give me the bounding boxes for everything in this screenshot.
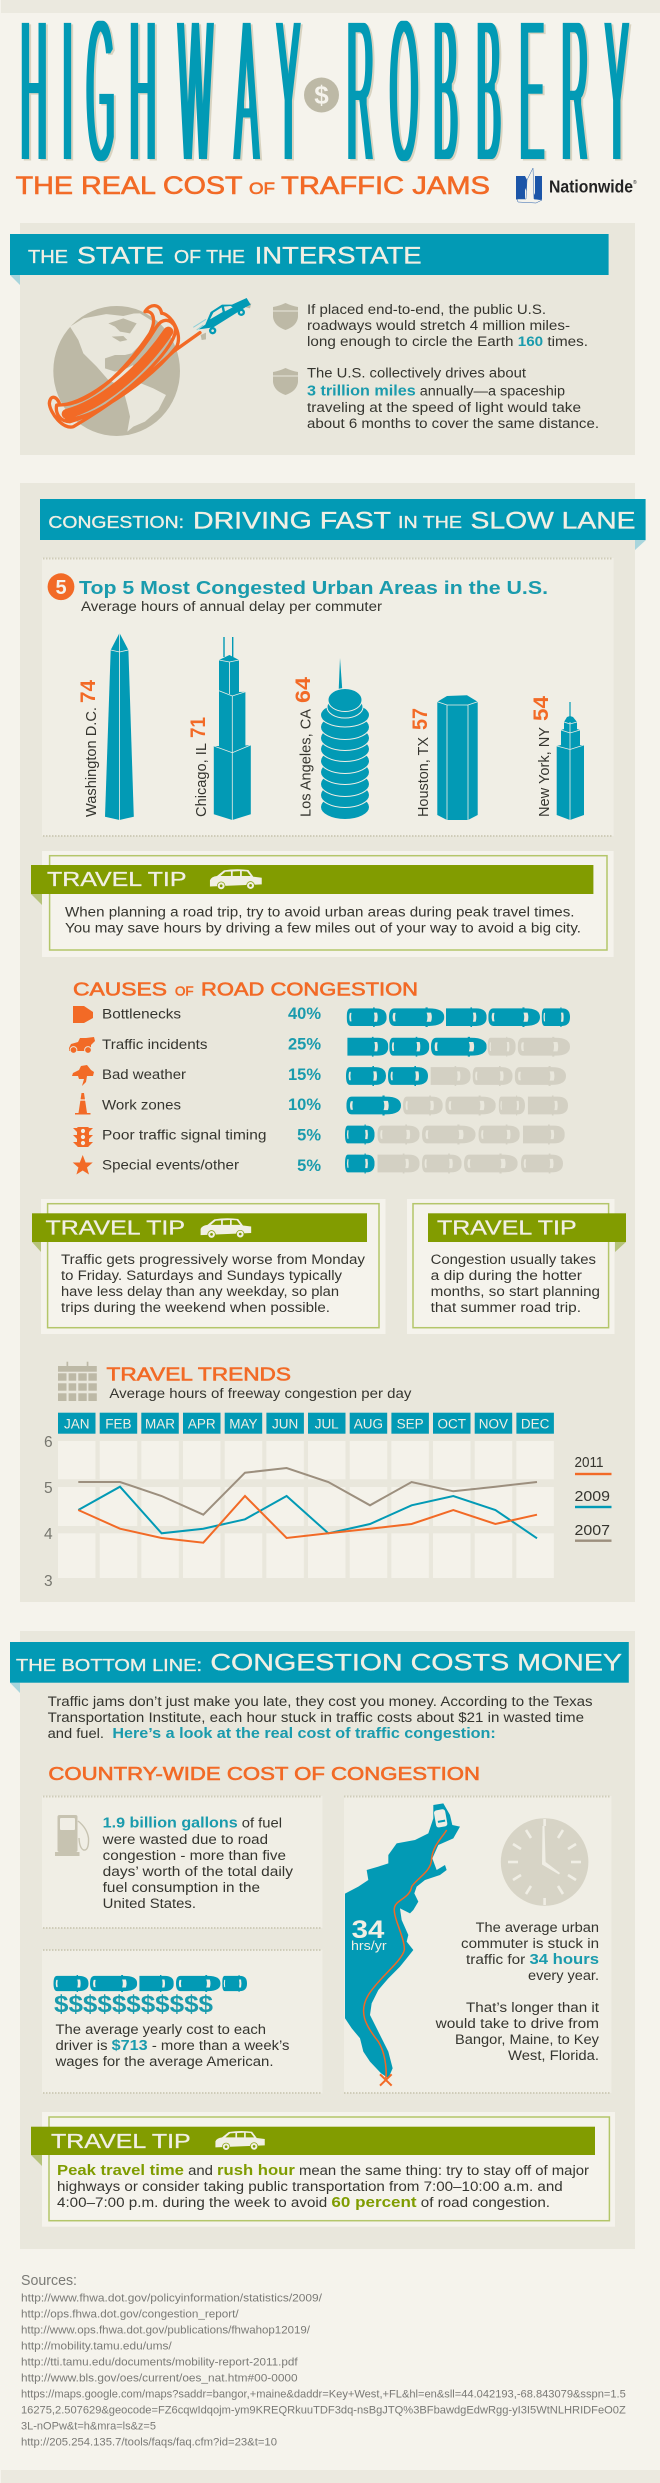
line: 2011 — [78, 1496, 537, 1543]
callout: travel tip 1: TRAVEL TIP — [47, 868, 186, 891]
building: Empire State — [557, 702, 584, 820]
callout: travel tip 1: You may save hours by driving a few miles out of your way to avoid a big city. — [65, 921, 581, 936]
text: fuel fact: 1.9 billion gallons of fuel — [103, 1816, 282, 1832]
text: yearly cost fact: The average yearly cost to each — [56, 2022, 266, 2037]
text: miles driven fact: The U.S. collectively drives about — [307, 366, 526, 380]
panel: state of the interstate — [10, 223, 635, 455]
axis labels — [44, 1434, 53, 1590]
icon: globe wrapped in road with car — [49, 298, 251, 436]
text: fuel fact: United States. — [103, 1896, 196, 1911]
row: traffic incidents — [69, 1036, 570, 1057]
section ribbon: congestion: SLOW LANE — [470, 507, 636, 534]
sources: http://www.bls.gov/oes/current/oes_nat.htm#00-0000 — [21, 2373, 298, 2385]
text: commuter fact: That’s longer than it — [466, 2000, 599, 2015]
label: Los Angeles 64: 64 — [292, 677, 315, 703]
row: work zones — [75, 1093, 568, 1116]
subtitle — [16, 173, 490, 200]
callout: travel tip 3: that summer road trip. — [431, 1300, 581, 1315]
icon: interstate shield 1 — [273, 303, 298, 330]
callout: travel tip 2: have less delay than any weekday, so plan — [61, 1284, 339, 1299]
section ribbon: congestion: DRIVING FAST — [193, 507, 391, 534]
heading: causes of road congestion: ROAD CONGESTION — [201, 978, 418, 999]
text: commuter fact: traffic for 34 hours — [466, 1952, 599, 1968]
heading: causes of road congestion — [73, 978, 418, 999]
section ribbon: bottom line — [10, 1642, 629, 1693]
label: New York 54: 54 — [530, 696, 553, 721]
callout: travel tip 4: TRAVEL TIP — [51, 2130, 191, 2153]
row: special events: Special events/other — [102, 1156, 239, 1172]
panel: commute map and clock — [344, 1796, 612, 2093]
logo: Nationwide: Nationwide — [549, 176, 633, 196]
stat: 34 hrs/yr: 34 — [352, 1916, 384, 1944]
section ribbon: state of the interstate: OF THE — [174, 246, 245, 267]
text: fuel fact — [102, 1816, 293, 1911]
callout: travel tip 2: to Friday. Saturdays and Sundays typically — [61, 1268, 342, 1283]
section ribbon: state of the interstate: THE — [28, 246, 68, 267]
row: bottlenecks — [73, 1005, 570, 1027]
line: 2007 — [78, 1468, 537, 1515]
month headers: MAY — [229, 1416, 258, 1432]
callout: travel tip 3: a dip during the hotter — [431, 1268, 583, 1283]
dollar signs: $$$$$$$$$$$ — [54, 1991, 214, 2018]
text: commuter fact: West, Florida. — [508, 2048, 599, 2063]
text: fuel fact: days’ worth of the total daily — [103, 1864, 293, 1879]
label: Chicago 71 — [187, 717, 210, 817]
text: fuel fact: fuel consumption in the — [103, 1880, 260, 1895]
heading: travel trends: TRAVEL TRENDS — [106, 1364, 291, 1385]
row: bottlenecks: 40% — [288, 1005, 321, 1023]
section ribbon: state of the interstate: INTERSTATE — [255, 242, 422, 269]
month headers: FEB — [105, 1416, 132, 1432]
row: poor traffic signal timing — [73, 1124, 565, 1147]
row: bad weather: 15% — [288, 1066, 321, 1084]
icon: clock — [501, 1818, 588, 1906]
row: work zones: 10% — [288, 1096, 321, 1114]
text: yearly cost fact: driver is $713 - more than a week’s — [56, 2038, 290, 2054]
section ribbon: state of the interstate: STATE — [77, 242, 164, 269]
callout: travel tip 3: months, so start planning — [431, 1284, 600, 1299]
text: miles driven fact — [307, 366, 599, 431]
legend: 2011 — [574, 1454, 604, 1471]
text: fuel fact: were wasted due to road — [102, 1832, 268, 1847]
section ribbon: bottom line: THE BOTTOM LINE: — [16, 1655, 202, 1675]
chart: causes of congestion — [69, 1005, 570, 1175]
text: intro: Here’s a look at the real cost of traffic congestion: — [112, 1726, 496, 1742]
subtitle: TRAFFIC JAMS — [281, 173, 490, 200]
bottom band — [1, 2470, 660, 2483]
subheading: freeway congestion: Average hours of freeway congestion per day — [109, 1386, 412, 1401]
heading: country-wide cost: COUNTRY-WIDE COST OF CONGESTION — [48, 1763, 480, 1784]
building: Los Angeles round tower — [320, 658, 370, 820]
logo: Nationwide — [516, 168, 637, 203]
text: yearly cost fact: wages for the average American. — [54, 2054, 273, 2069]
text: miles driven fact: about 6 months to cover the same distance. — [307, 416, 599, 431]
panel: congestion — [20, 483, 646, 1602]
axis labels: 3 — [44, 1573, 53, 1590]
text: roadways fact: long enough to circle the Earth 160 times. — [307, 334, 588, 349]
panel: fuel wasted — [42, 1796, 322, 1928]
row: bad weather — [72, 1065, 566, 1086]
month headers: NOV — [479, 1416, 508, 1432]
building: Chicago tower — [214, 637, 251, 820]
month headers: JUL — [315, 1416, 339, 1432]
badge: number 5: 5 — [55, 577, 67, 599]
label: Houston 57: Houston, TX — [415, 737, 432, 817]
callout: travel tip 2: Traffic gets progressively worse from Monday — [61, 1252, 365, 1267]
callout: travel tip 1: When planning a road trip, try to avoid urban areas during peak travel times. — [65, 905, 574, 920]
panel: top 5 congested urban areas — [42, 558, 614, 836]
axis labels: 4 — [44, 1526, 53, 1543]
row: special events: 5% — [297, 1157, 321, 1175]
legend — [574, 1454, 612, 1542]
sources: http://205.254.135.7/tools/faqs/faq.cfm?id=23&t=10 — [21, 2437, 277, 2449]
row: traffic incidents: Traffic incidents — [102, 1036, 208, 1052]
label: Los Angeles 64: Los Angeles, CA — [298, 709, 315, 817]
sources: https://maps.google.com/maps?saddr=bangor,+maine&daddr=Key+West,+FL&hl=en&sll=44.042193,-68.843079&sspn=1.5 — [21, 2389, 626, 2401]
sources: 16275,2.507629&geocode=FZ6cqwIdqojm-ym9KREQRkuuTDF3dq-nsBgJTQ%3BFbawdgEdwRgg-yI3I5WtNLHRIDFeO0Z — [21, 2405, 626, 2417]
panel: yearly cost — [42, 1950, 322, 2093]
row: bottlenecks: Bottlenecks — [102, 1006, 181, 1022]
icon: calendar — [58, 1362, 97, 1401]
building: Washington monument — [105, 633, 134, 820]
sources: http://tti.tamu.edu/documents/mobility-report-2011.pdf — [21, 2357, 299, 2369]
badge: number 5 — [48, 573, 74, 600]
section ribbon: congestion: CONGESTION: — [48, 512, 184, 532]
line: 2009 — [78, 1487, 537, 1538]
label: Washington D.C. 74: 74 — [77, 680, 100, 703]
text: intro — [48, 1694, 593, 1742]
heading: causes of road congestion: CAUSES — [73, 978, 167, 999]
callout: travel tip 3: TRAVEL TIP — [437, 1216, 577, 1240]
text: intro: Traffic jams don’t just make you late, they cost you money. According to the Texas — [48, 1694, 593, 1709]
sources: http://ops.fhwa.dot.gov/congestion_report/ — [21, 2309, 240, 2321]
label: Houston 57: 57 — [409, 708, 432, 730]
sources: http://mobility.tamu.edu/ums/ — [21, 2341, 173, 2353]
row: bad weather: Bad weather — [102, 1066, 186, 1082]
text: intro: Transportation Institute, each hour stuck in traffic costs about $21 in wasted time — [48, 1710, 584, 1725]
month headers: MAR — [145, 1416, 175, 1432]
top band — [1, 0, 660, 13]
icon: gas pump — [55, 1815, 89, 1856]
stat: 34 hrs/yr — [351, 1916, 387, 1953]
text: roadways fact: If placed end-to-end, the public U.S. — [307, 302, 546, 317]
subheading: average hours: Average hours of annual delay per commuter — [81, 599, 383, 614]
stat: 34 hrs/yr: hrs/yr — [351, 1938, 387, 1953]
callout: travel tip 2: trips during the weekend when possible. — [61, 1300, 330, 1315]
callout: travel tip 4: Peak travel time and rush hour mean the same thing: try to stay off of major — [57, 2162, 590, 2179]
callout: travel tip 4: 4:00–7:00 p.m. during the week to avoid 60 percent of road congestion. — [57, 2194, 550, 2211]
month headers: DEC — [521, 1416, 550, 1432]
row: poor traffic signal timing: 5% — [297, 1126, 321, 1144]
legend: 2009 — [574, 1488, 610, 1505]
month headers: OCT — [437, 1416, 466, 1432]
text: roadways fact — [307, 302, 588, 349]
text: commuter fact: commuter is stuck in — [461, 1936, 599, 1951]
callout: travel tip 2: TRAVEL TIP — [46, 1216, 185, 1240]
label: New York 54 — [530, 696, 553, 817]
section ribbon: congestion: IN THE — [398, 512, 462, 532]
sources: 3L-nOPw&t=h&mra=ls&z=5 — [21, 2421, 156, 2433]
month headers — [58, 1413, 554, 1434]
icon: dollar coin — [304, 78, 339, 112]
heading: top 5: Top 5 Most Congested Urban Areas in the U.S. — [79, 577, 548, 598]
axis labels: 5 — [44, 1480, 53, 1497]
callout: travel tip 4: highways or consider taking public transportation from 7:00–10:00 a.m. and — [57, 2179, 563, 2194]
row: special events — [73, 1154, 563, 1175]
callout: travel tip 3 — [407, 1199, 626, 1334]
callout: travel tip 4 — [31, 2112, 615, 2227]
callout: travel tip 3: Congestion usually takes — [431, 1252, 596, 1267]
text: miles driven fact: 3 trillion miles annually—a spaceship — [307, 382, 565, 400]
row: traffic incidents: 25% — [288, 1036, 321, 1054]
text: yearly cost fact — [54, 2022, 290, 2069]
row: work zones: Work zones — [102, 1096, 181, 1112]
map: east coast route — [345, 1803, 460, 2086]
text: commuter fact: every year. — [528, 1968, 599, 1983]
subtitle: OF — [249, 180, 275, 198]
legend: 2007 — [574, 1522, 610, 1539]
text: commuter fact — [434, 1920, 599, 2063]
callout: travel tip 1 — [31, 851, 614, 957]
label: Chicago 71: 71 — [187, 717, 210, 738]
month headers: AUG — [354, 1416, 383, 1432]
month headers: APR — [188, 1416, 216, 1432]
sources: http://www.fhwa.dot.gov/policyinformation/statistics/2009/ — [21, 2293, 323, 2305]
text: commuter fact: Bangor, Maine, to Key — [455, 2032, 599, 2047]
chart: travel trends line chart — [44, 1413, 612, 1590]
label: Los Angeles 64 — [292, 677, 315, 817]
sources: Sources: — [21, 2272, 77, 2289]
month headers: JAN — [64, 1416, 89, 1432]
label: Washington D.C. 74: Washington D.C. — [83, 707, 100, 817]
title: Highway Robbery — [21, 0, 629, 207]
text: intro: and fuel. — [48, 1726, 104, 1741]
sources — [21, 2272, 626, 2449]
panel: bottom line — [10, 1631, 635, 2249]
month headers: JUN — [272, 1416, 298, 1432]
text: roadways fact: roadways would stretch 4 million miles- — [307, 318, 570, 333]
heading: causes of road congestion: OF — [175, 983, 194, 998]
row: poor traffic signal timing: Poor traffic signal timing — [102, 1126, 266, 1142]
icon: interstate shield 2 — [273, 368, 298, 395]
callout: travel tip 2 — [32, 1199, 386, 1334]
label: Washington D.C. 74 — [77, 680, 100, 817]
label: New York 54: New York, NY — [536, 727, 553, 817]
month headers: SEP — [397, 1416, 424, 1432]
icon: row of cars — [54, 1975, 247, 1992]
text: commuter fact: The average urban — [476, 1920, 599, 1935]
text: fuel fact: congestion - more than five — [103, 1848, 286, 1863]
axis labels: 6 — [44, 1434, 53, 1451]
icon: dollar coin: $ — [314, 80, 329, 110]
text: commuter fact: would take to drive from — [434, 2016, 599, 2031]
subtitle: THE REAL COST — [16, 173, 243, 200]
section ribbon: state of the interstate — [10, 234, 609, 285]
label: Houston 57 — [409, 708, 432, 817]
logo: Nationwide: ® — [633, 179, 637, 186]
sources: http://www.ops.fhwa.dot.gov/publications/fhwahop12019/ — [21, 2325, 311, 2337]
section ribbon: bottom line: CONGESTION COSTS MONEY — [210, 1650, 622, 1677]
label: Chicago 71: Chicago, IL — [193, 743, 210, 817]
text: miles driven fact: traveling at the speed of light would take — [307, 400, 581, 415]
section ribbon: congestion — [40, 499, 646, 550]
building: Houston tower — [437, 695, 478, 820]
